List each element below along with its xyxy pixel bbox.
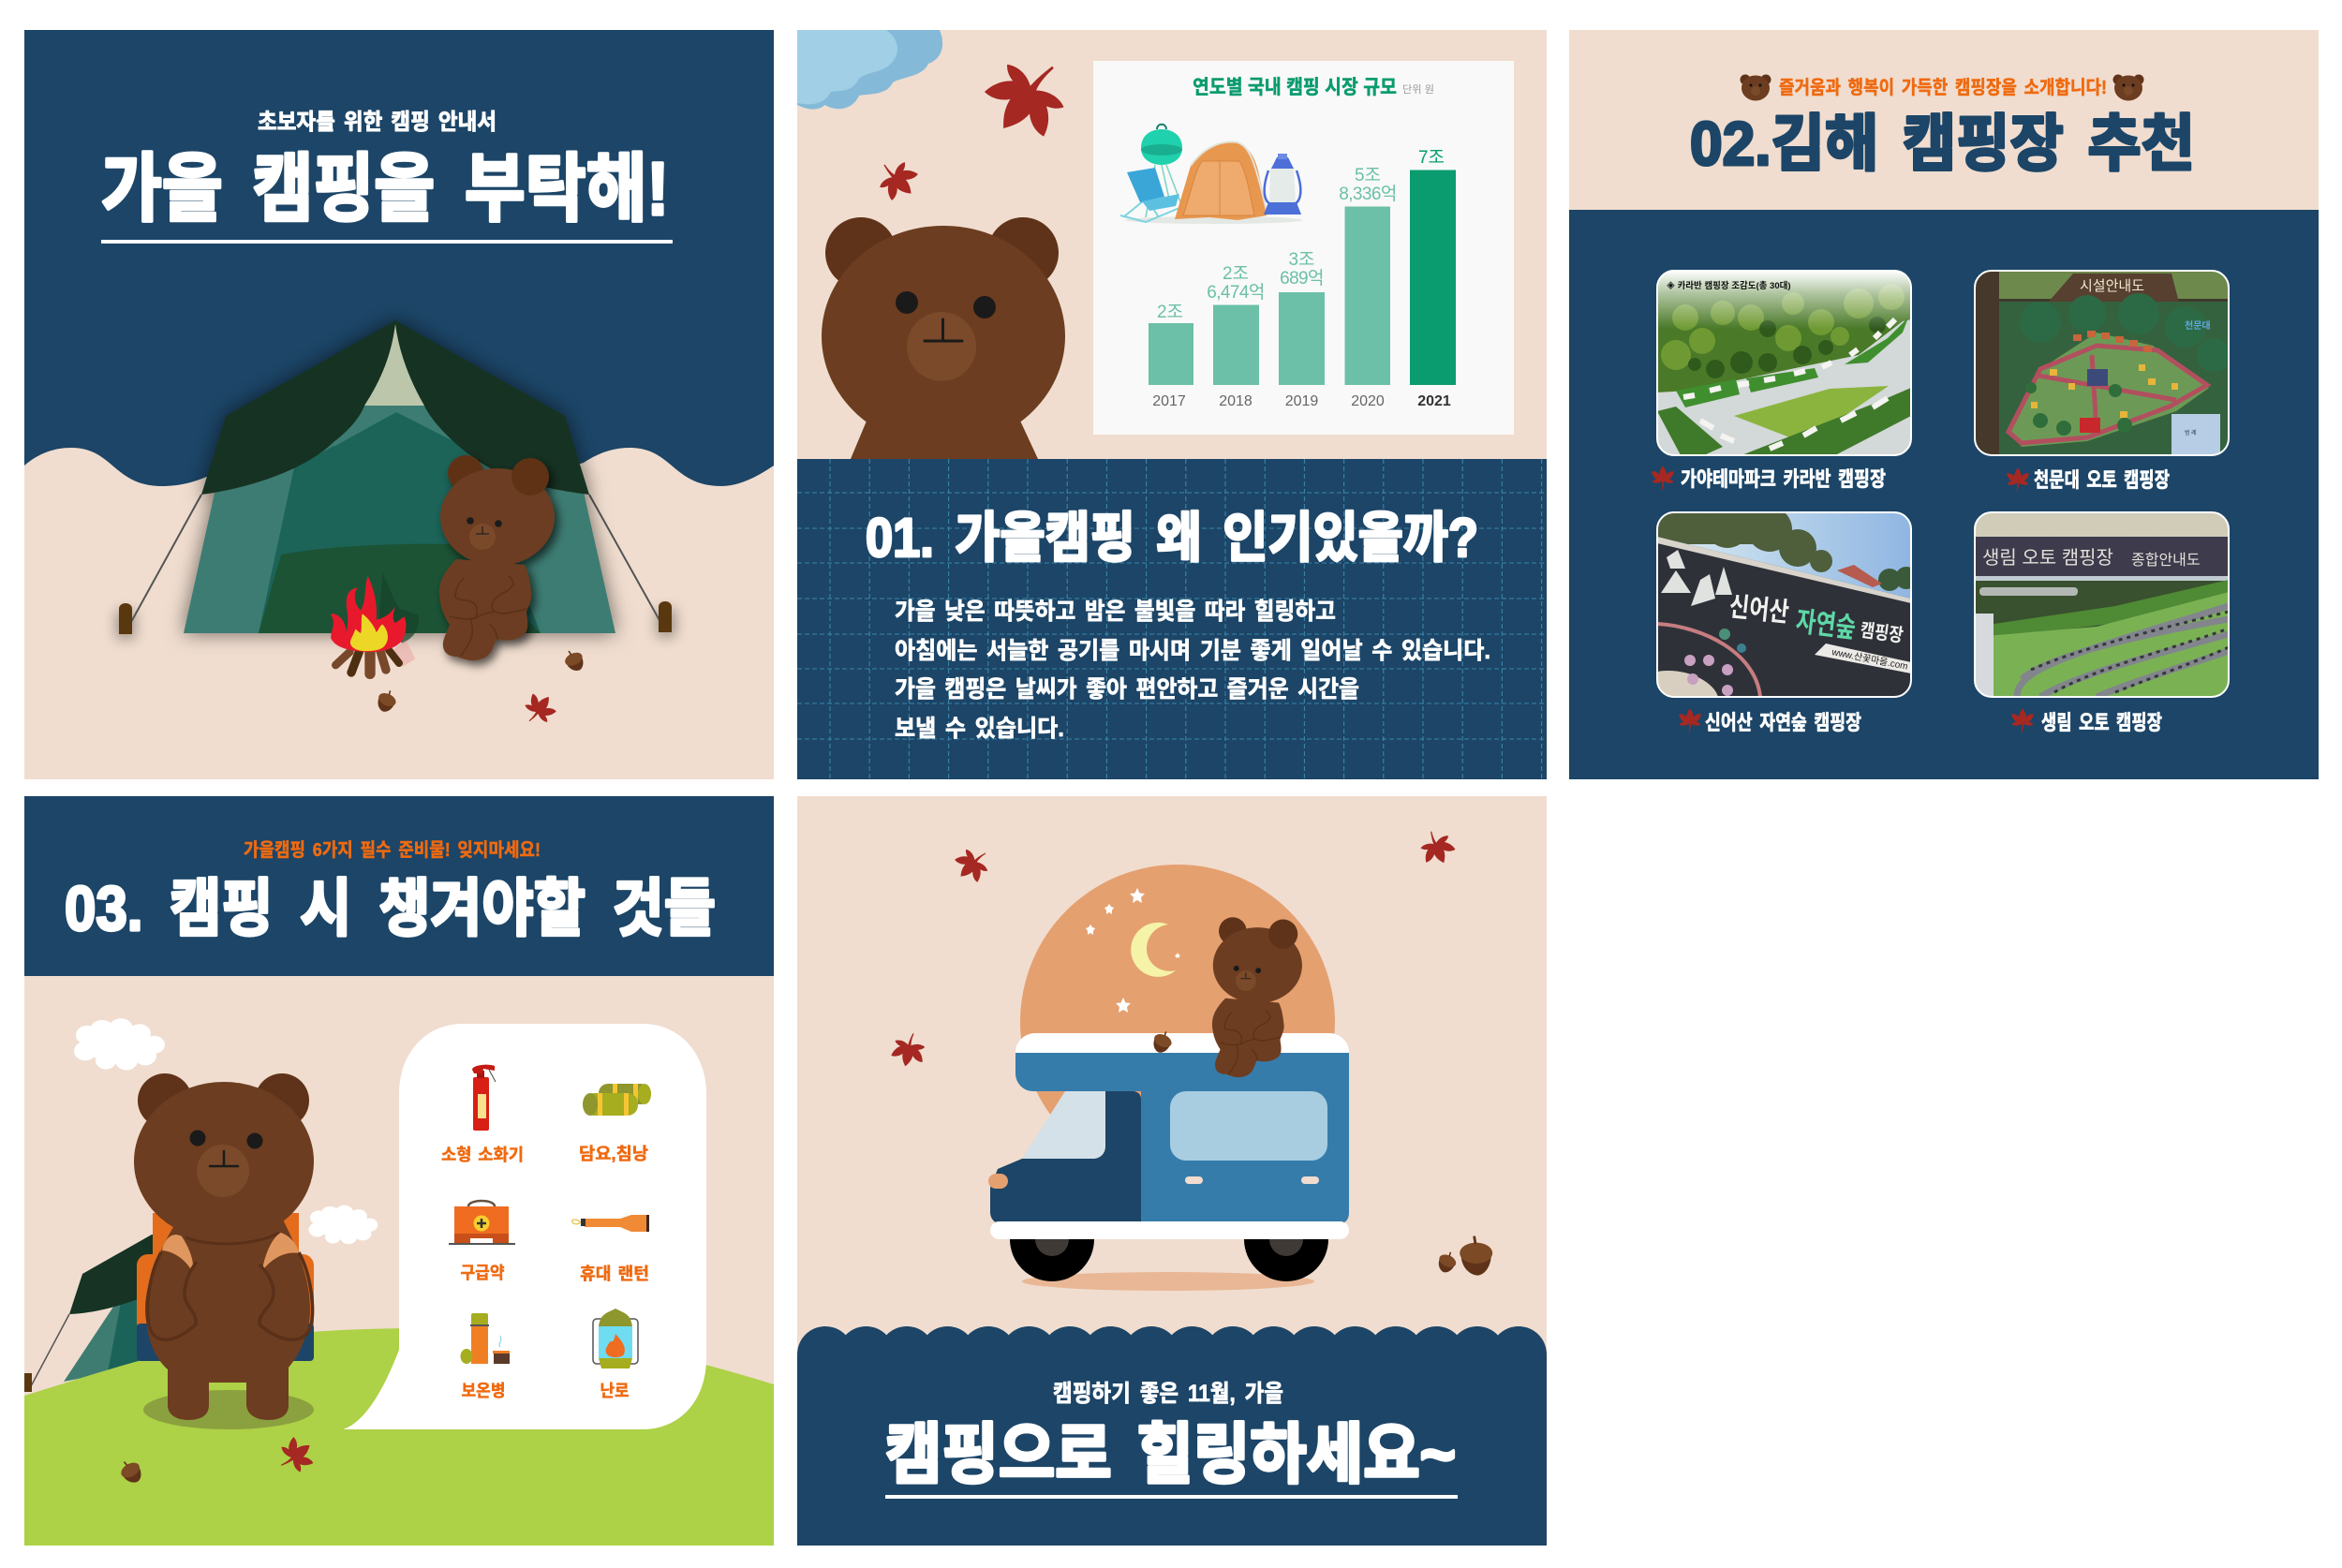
label: 담요,침낭 [579,1145,648,1163]
tent ropes and pegs [116,495,675,639]
speech bubble with items [343,1024,706,1429]
heading: 캠핑으로 힐링하세요~ [885,1418,1456,1492]
label: 구급약 [461,1264,504,1282]
year axis labels: 2020 [1351,393,1385,409]
caption with leaf icon [2007,468,2170,492]
icon: first aid kit [449,1201,515,1245]
body text: 보낼 수 있습니다. [895,716,1064,742]
body text: 가을 낮은 따뜻하고 밤은 불빛을 따라 힐링하고 [895,599,1336,625]
unit note: 단위 원 [1402,83,1434,96]
label: 난로 [600,1382,630,1400]
body text: 가을 캠핑은 날씨가 좋아 편안하고 즐거운 시간을 [895,676,1359,703]
photo: Sineosan nature forest sign [1657,501,1918,697]
year axis labels: 2019 [1285,393,1318,409]
illustration: orange moon disc [1020,865,1335,1179]
photo: observatory auto campsite map: 시설안내도 [2080,278,2144,294]
icon: maple leaf [949,841,996,888]
icon: acorn on roof [1149,1028,1175,1056]
label: 보온병 [461,1382,506,1400]
illustration: green hill [24,1328,774,1546]
bar values: 2조 [1223,264,1249,284]
icon: maple leaf [890,1029,927,1070]
year axis labels [1153,395,1450,406]
icon: blankets and sleeping bags [583,1084,651,1116]
icon: bear head right [2113,75,2143,101]
text panel: navy grid section [797,459,1547,779]
icon: large maple leaf [985,64,1064,137]
caption with leaf icon: 생림 오토 캠핑장 [2041,711,2162,734]
bar values: 2조 [1157,303,1183,322]
photo: Sineosan nature forest sign: 자연숲 [1794,606,1858,644]
label: 소형 소화기 [441,1146,524,1164]
icon: bear head left [1741,75,1771,101]
title: 가을 캠핑을 부탁해! [101,147,669,230]
illustration: camper van [988,1033,1349,1281]
icon: cloud [74,1018,165,1070]
title underline [101,240,673,244]
underline [885,1495,1458,1499]
closing banner [797,1326,1547,1546]
caption with leaf icon: 신어산 자연숲 캠핑장 [1705,711,1861,734]
illustration: bear on roof [1212,917,1302,1077]
caption with leaf icon [1679,709,1861,734]
photo: Sineosan nature forest sign: www.산꽃마을.com [1830,646,1909,673]
label: 휴대 랜턴 [580,1265,649,1283]
body text: 아침에는 서늘한 공기를 마시며 기분 좋게 일어날 수 있습니다. [895,638,1490,664]
bar values: 3조 [1288,250,1315,270]
photo: Sineosan nature forest sign: 캠핑장 [1859,619,1905,646]
illustration: camping gear [1120,125,1303,224]
caption with leaf icon: 천문대 오토 캠핑장 [2034,468,2170,492]
icon: acorn [116,1457,146,1487]
chart title: 연도별 국내 캠핑 시장 규모 [1193,77,1397,98]
panel: why autumn camping is popular [797,30,1547,779]
panel: Gimhae campsite recommendations [1569,30,2319,779]
illustration: ground shadow [1022,1272,1314,1291]
illustration: bear face [822,217,1065,459]
caption with leaf icon [2011,709,2162,734]
icon: large acorn [1460,1236,1492,1276]
icon: flashlight [572,1215,649,1232]
illustration: tent [184,320,615,633]
bar values: 8,336억 [1339,184,1397,204]
photo: Gaya theme park caravan site map [1657,271,1911,455]
heading: 02.김해 캠핑장 추천 [1690,110,2195,179]
icon: small maple leaf [880,162,918,200]
icon: crescent moon and stars [1086,888,1180,1013]
icon: maple leaf [525,693,556,722]
bar values: 6,474억 [1207,282,1265,303]
illustration: cloud [797,30,942,110]
subtitle: 가을캠핑 6가지 필수 준비물! 잊지마세요! [244,839,541,861]
photo: Saengnim auto campsite map: 종합안내도 [2131,552,2201,569]
panel: camping checklist [24,796,774,1546]
illustration: sitting bear [439,455,555,660]
icon: maple leaf [1416,825,1459,869]
illustration: tent behind bear [24,1235,212,1392]
icon: lantern stove [593,1309,638,1368]
icon: acorn [565,650,583,671]
heading: 01. 가을캠핑 왜 인기있을까? [866,507,1478,569]
year axis labels: 2018 [1219,393,1253,409]
icon: small acorn [1434,1249,1460,1276]
photo: Gaya theme park caravan site map: ◈ 카라반 캠핑장 조감도(총 30대) [1667,280,1791,291]
icon: maple leaf [272,1432,319,1479]
photo: Saengnim auto campsite map [1975,512,2229,697]
photo: observatory auto campsite map: 천문대 [2185,319,2211,332]
subtitle: 즐거움과 행복이 가득한 캠핑장을 소개합니다! [1779,77,2107,98]
illustration: campfire [331,573,419,673]
photo: Sineosan nature forest sign: 신어산 [1727,591,1790,629]
bar values: 7조 [1418,148,1445,168]
photo: Saengnim auto campsite map: 생림 오토 캠핑장 [1982,547,2113,569]
body text [895,599,1490,742]
bar chart: camping market size by year [1093,61,1514,435]
bar values [1157,148,1445,322]
panel: cover, autumn camping [24,30,774,779]
panel: closing, camper van [797,796,1547,1546]
bar values: 5조 [1355,166,1381,185]
year axis labels: 2017 [1152,393,1186,409]
illustration: standing bear with backpack [134,1073,314,1429]
caption with leaf icon: 가야테마파크 카라반 캠핑장 [1681,467,1886,491]
heading: 03. 캠핑 시 챙겨야할 것들 [65,874,716,944]
subtitle: 캠핑하기 좋은 11월, 가을 [1053,1381,1283,1407]
icon: fire extinguisher [472,1065,496,1131]
bar values: 689억 [1280,268,1324,288]
icon: thermos [461,1313,510,1364]
heading: subtitle: 초보자를 위한 캠핑 안내서 [258,110,497,135]
photo: observatory auto campsite map: 범 례 [2185,429,2197,436]
bars [1149,170,1456,385]
icon: cloud [309,1206,378,1244]
icon: acorn [378,690,396,712]
year axis labels: 2021 [1417,393,1451,409]
photo: observatory auto campsite map [1975,271,2231,456]
